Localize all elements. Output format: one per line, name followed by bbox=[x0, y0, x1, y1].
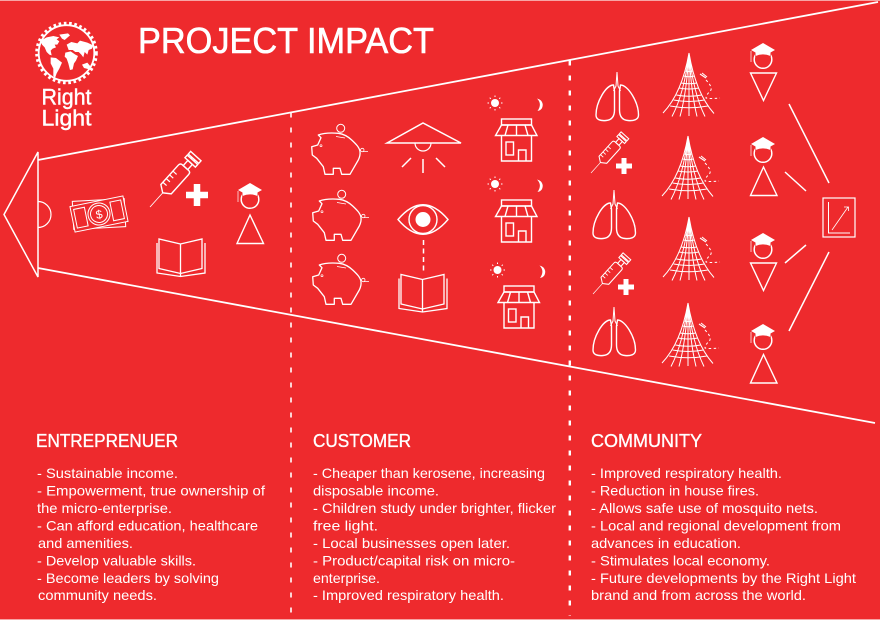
text: entrepreneur: the micro-enterprise. bbox=[37, 500, 172, 516]
text: customer: - Improved respiratory health. bbox=[313, 587, 504, 603]
text: entrepreneur: - Develop valuable skills. bbox=[37, 552, 196, 568]
text: entrepreneur: - Sustainable income. bbox=[37, 465, 178, 481]
logo: Right Light bbox=[37, 24, 96, 130]
icon: eye bbox=[398, 205, 448, 234]
icon: book bbox=[399, 274, 447, 312]
text: customer: disposable income. bbox=[313, 482, 439, 498]
text: community: - Allows safe use of mosquito nets. bbox=[591, 500, 818, 516]
text: community bbox=[591, 431, 856, 603]
text: customer bbox=[313, 431, 556, 603]
icon: piggy bank 1 bbox=[312, 124, 368, 174]
text: entrepreneur: - Become leaders by solving bbox=[37, 570, 219, 586]
icon: money: $ bbox=[94, 207, 104, 222]
text: community: advances in education. bbox=[591, 535, 741, 551]
title: PROJECT IMPACT bbox=[138, 20, 434, 61]
icon: syringe 2 bbox=[587, 132, 629, 176]
text: community: - Reduction in house fires. bbox=[591, 482, 759, 498]
text: entrepreneur: ENTREPRENUER bbox=[36, 431, 178, 451]
text: customer: enterprise. bbox=[313, 570, 380, 586]
icon: lungs 2 bbox=[593, 190, 636, 239]
connector lines bbox=[785, 104, 829, 331]
icon: mosquito net 2 bbox=[662, 136, 719, 200]
text: customer: - Children study under brighter, flicker bbox=[313, 500, 556, 516]
text: entrepreneur: - Empowerment, true ownership of bbox=[37, 482, 265, 498]
logo: Right Light: Right bbox=[42, 84, 92, 110]
icon: lungs 1 bbox=[596, 72, 638, 121]
icon: shop 3 bbox=[490, 262, 545, 328]
text: community: - Stimulates local economy. bbox=[591, 552, 770, 568]
text: community: brand and from across the world. bbox=[591, 587, 806, 603]
icon: book bbox=[157, 239, 205, 276]
icon: lamp bbox=[387, 123, 461, 173]
funnel of impact bbox=[4, 2, 878, 423]
text: community: COMMUNITY bbox=[591, 431, 702, 451]
text: customer: - Local businesses open later. bbox=[313, 535, 510, 551]
icon: lungs 3 bbox=[593, 307, 636, 356]
icon: plus bbox=[186, 184, 208, 206]
icon: piggy bank 2 bbox=[313, 190, 369, 240]
icon: shop 2 bbox=[488, 176, 543, 242]
icon: plus 3 bbox=[618, 279, 634, 295]
logo: Right Light: Light bbox=[42, 106, 92, 130]
divider: community bbox=[569, 60, 571, 616]
text: entrepreneur: and amenities. bbox=[38, 535, 133, 551]
icon: mosquito net 4 bbox=[662, 303, 719, 366]
icon: piggy bank 3 bbox=[313, 254, 369, 304]
dashed sight line bbox=[422, 240, 424, 273]
text: community: - Improved respiratory health. bbox=[591, 465, 782, 481]
text: entrepreneur bbox=[36, 431, 265, 603]
text: customer: CUSTOMER bbox=[313, 431, 411, 451]
icon: plus 2 bbox=[616, 158, 632, 174]
icon: syringe bbox=[145, 151, 201, 212]
text: customer: free light. bbox=[313, 518, 378, 534]
icon: graduate 4 bbox=[750, 323, 777, 383]
icon: syringe 3 bbox=[589, 253, 631, 297]
text: community: - Future developments by the Right Light bbox=[591, 570, 856, 586]
text: customer: - Cheaper than kerosene, increasing bbox=[313, 465, 545, 481]
icon: growth chart bbox=[823, 198, 855, 237]
icon: graduate 1 bbox=[750, 42, 776, 100]
icon: mosquito net 3 bbox=[663, 217, 720, 280]
icon: money bbox=[70, 196, 128, 232]
icon: graduate 3 bbox=[750, 232, 776, 290]
divider: customer bbox=[290, 112, 292, 616]
text: entrepreneur: community needs. bbox=[38, 587, 157, 603]
icon: graduate bbox=[237, 182, 264, 244]
icon: shop 1 bbox=[488, 96, 543, 161]
icon: mosquito net 1 bbox=[663, 53, 720, 116]
text: entrepreneur: - Can afford education, healthcare bbox=[37, 518, 258, 534]
icon: graduate 2 bbox=[750, 136, 777, 196]
text: customer: - Product/capital risk on micro- bbox=[313, 552, 515, 568]
text: community: - Local and regional development from bbox=[591, 518, 841, 534]
